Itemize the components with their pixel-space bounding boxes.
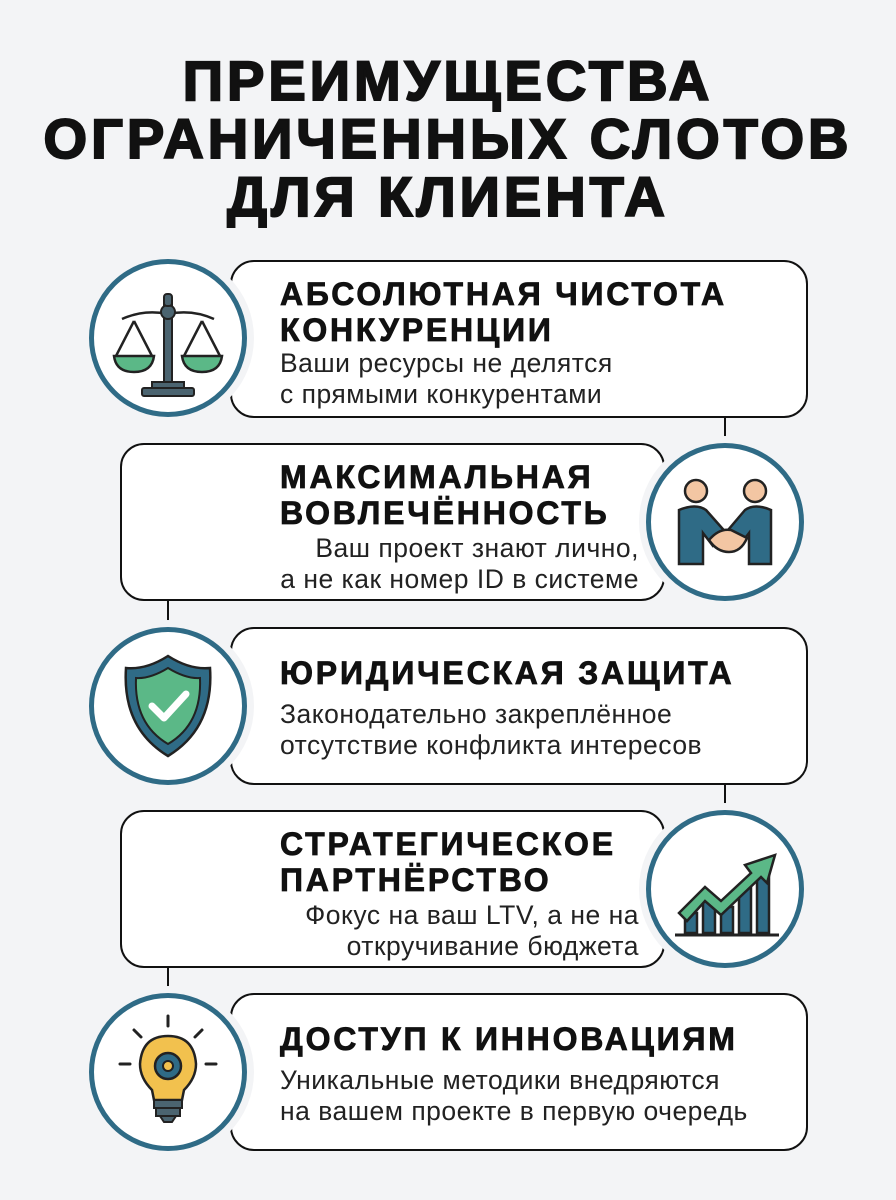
text: отсутствие конфликта интересов — [280, 730, 702, 760]
panel: innovations — [230, 993, 808, 1151]
title: ДЛЯ КЛИЕНТА — [227, 165, 669, 228]
heading: ДОСТУП К ИННОВАЦИЯМ — [280, 1021, 738, 1057]
text — [280, 699, 702, 760]
text: Ваш проект знают лично, — [315, 533, 639, 563]
text: откручивание бюджета — [347, 931, 639, 961]
text — [305, 900, 639, 961]
panel: competition — [230, 260, 808, 418]
text: а не как номер ID в системе — [280, 564, 639, 594]
title: ПРЕИМУЩЕСТВА — [183, 49, 713, 112]
title: ОГРАНИЧЕННЫХ СЛОТОВ — [44, 107, 852, 170]
heading — [280, 826, 616, 898]
panel: engagement — [120, 443, 665, 601]
text: на вашем проекте в первую очередь — [280, 1096, 748, 1126]
heading: ВОВЛЕЧЁННОСТЬ — [280, 495, 610, 531]
heading: ЮРИДИЧЕСКАЯ ЗАЩИТА — [280, 655, 734, 691]
heading — [280, 276, 727, 348]
title — [44, 49, 852, 228]
icon: scales — [89, 259, 247, 417]
text — [280, 348, 613, 409]
panel: legal — [230, 627, 808, 785]
icon: growth chart — [646, 810, 804, 968]
icon: shield — [89, 627, 247, 785]
icon: handshake — [646, 443, 804, 601]
panel: partnership — [120, 810, 665, 968]
text: с прямыми конкурентами — [280, 379, 602, 409]
heading: АБСОЛЮТНАЯ ЧИСТОТА — [280, 276, 727, 312]
heading: КОНКУРЕНЦИИ — [280, 312, 554, 348]
icon: lightbulb — [89, 993, 247, 1151]
text: Фокус на ваш LTV, а не на — [305, 900, 639, 930]
text: Уникальные методики внедряются — [280, 1065, 720, 1095]
text: Ваши ресурсы не делятся — [280, 348, 613, 378]
text — [280, 1065, 748, 1126]
text: Законодательно закреплённое — [280, 699, 672, 729]
heading: СТРАТЕГИЧЕСКОЕ — [280, 826, 616, 862]
text — [280, 533, 639, 594]
heading — [280, 459, 610, 531]
heading: МАКСИМАЛЬНАЯ — [280, 459, 593, 495]
heading: ПАРТНЁРСТВО — [280, 862, 552, 898]
